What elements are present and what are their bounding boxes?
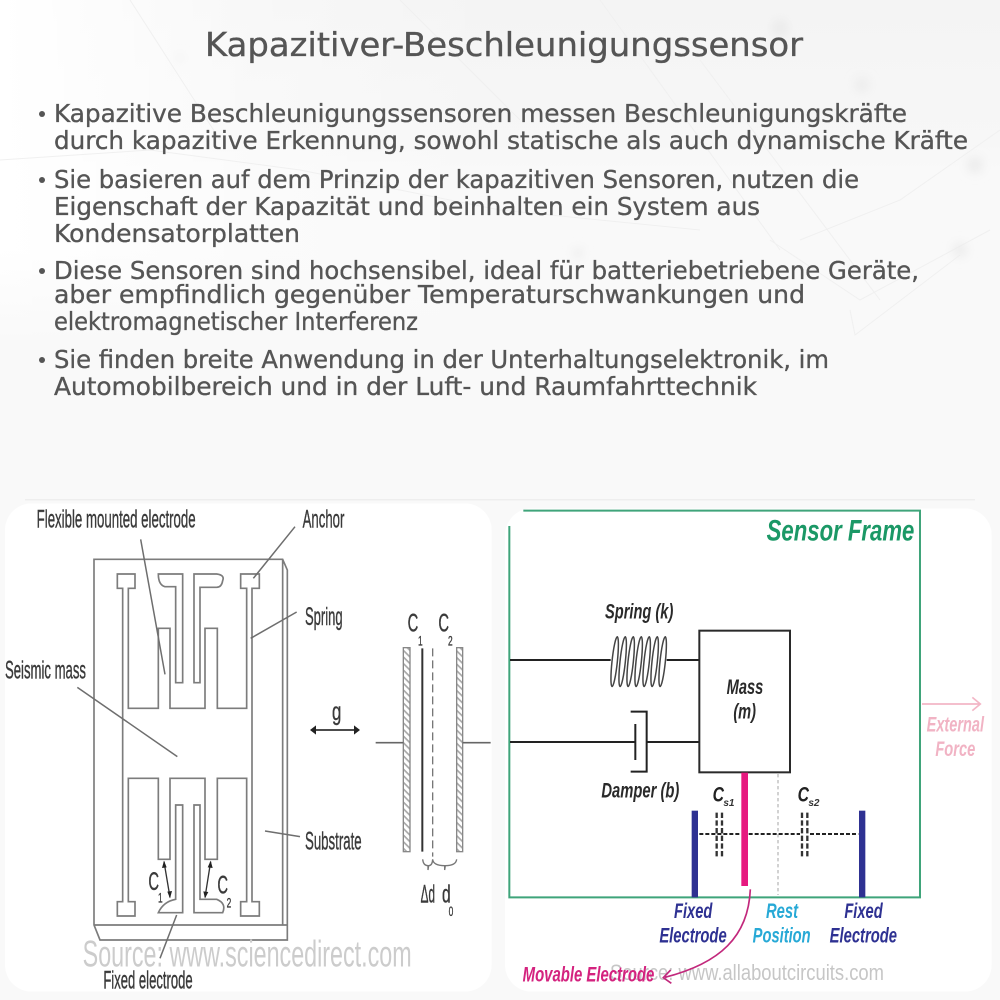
panel: sensor frame model (505, 508, 992, 992)
leader lines (77, 527, 300, 958)
labels: C (148, 868, 159, 896)
labels: Spring (305, 603, 343, 631)
bullet 3: Diese Sensoren sind hochsensibel, ideal für batteriebetriebene Geräte, (54, 256, 919, 285)
movable electrode label and arrow: Movable Electrode (523, 962, 654, 986)
divider (25, 499, 975, 500)
bullet 4: Sie finden breite Anwendung in der Unterhaltungselektronik, im (54, 345, 829, 374)
rest position label: Rest (766, 899, 799, 923)
spring: Spring (k) (605, 599, 673, 623)
fixed electrode labels: Fixed (844, 899, 883, 923)
bullet 2: Sie basieren auf dem Prinzip der kapazitiven Sensoren, nutzen die (54, 165, 859, 194)
sensor frame label: Sensor Frame (767, 515, 914, 548)
bullet 2: Eigenschaft der Kapazität und beinhalten ein System aus (54, 192, 760, 221)
labels (5, 505, 453, 994)
bullet 4: Automobilbereich und in der Luft- und Raumfahrttechnik (54, 372, 758, 401)
mass: (m) (733, 700, 756, 724)
mass: Mass (727, 675, 763, 699)
panel background (5, 503, 492, 992)
capacitance gap dashes: C (798, 783, 809, 807)
labels: C (408, 610, 418, 638)
capacitance gap dashes: C (713, 783, 724, 807)
labels: 0 (449, 903, 453, 919)
labels: 1 (418, 632, 423, 648)
capacitance gap dashes (699, 783, 858, 858)
bullet 1: Kapazitive Beschleunigungssensoren messen Beschleunigungskräfte (54, 99, 907, 128)
spring (510, 599, 699, 687)
panel: accelerometer structure (5, 503, 492, 994)
external force arrow: Force (935, 737, 975, 761)
fixed electrode labels: Fixed (674, 899, 713, 923)
capacitance arrows (164, 862, 211, 897)
substrate (94, 559, 287, 940)
panel background (505, 508, 992, 992)
movable electrode bar (741, 773, 748, 886)
fixed electrode labels: Electrode (830, 924, 897, 948)
labels: 2 (227, 894, 231, 910)
labels: Seismic mass (5, 656, 86, 684)
labels: Δd (421, 880, 435, 908)
movable electrode label and arrow (523, 889, 750, 986)
mass (699, 631, 790, 772)
bullet list (39, 99, 968, 401)
labels: Flexible mounted electrode (37, 505, 196, 533)
rest position line (776, 774, 780, 895)
external force arrow (922, 697, 985, 761)
bullet 1 (39, 99, 968, 155)
labels: Fixed electrode (103, 966, 193, 994)
labels: C (438, 610, 449, 638)
labels: g (332, 698, 341, 726)
damper (510, 712, 699, 802)
sensor frame (509, 511, 920, 897)
capacitor plates (376, 648, 491, 870)
rest position label (753, 899, 811, 948)
fixed electrode labels (659, 899, 897, 948)
labels: Substrate (305, 827, 362, 855)
capacitance gap dashes: s2 (808, 798, 820, 809)
bullet 2 (39, 165, 859, 248)
fixed electrode labels: Electrode (659, 924, 727, 948)
fixed electrode bars (692, 811, 865, 897)
seismic mass outline (117, 574, 259, 916)
fixed electrodes (158, 574, 224, 913)
labels: Anchor (303, 505, 345, 533)
bullet 2: Kondensatorplatten (54, 219, 300, 248)
watermark: source: Source: www.sciencedirect.com (83, 933, 412, 975)
labels: 1 (158, 890, 163, 906)
labels: C (217, 871, 228, 899)
watermark: source: Source: www.allaboutcircuits.com (610, 960, 884, 985)
bullet 1: durch kapazitive Erkennung, sowohl statische als auch dynamische Kräfte (54, 126, 968, 155)
bullet 3 (39, 256, 919, 336)
labels: d (442, 880, 451, 908)
labels: 2 (448, 632, 453, 648)
damper: Damper (b) (601, 778, 679, 802)
capacitance gap dashes: s1 (723, 798, 735, 809)
arrow: g (310, 725, 360, 735)
bullet 3: elektromagnetischer Interferenz (54, 307, 418, 336)
bullet 3: aber empfindlich gegenüber Temperaturschwankungen und (54, 280, 805, 309)
bullet 4 (39, 345, 829, 401)
title: Kapazitiver-Beschleunigungssensor (205, 25, 803, 64)
rest position label: Position (753, 924, 811, 948)
